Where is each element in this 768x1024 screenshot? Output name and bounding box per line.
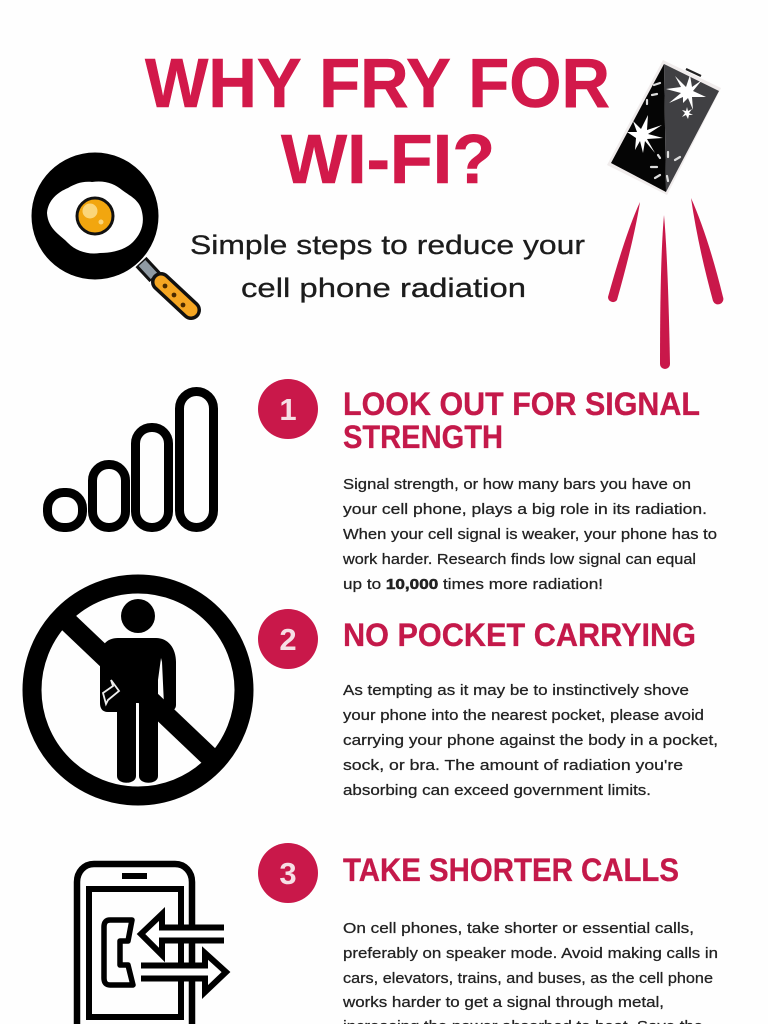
step 3 badge: 3	[279, 856, 297, 891]
step 2 badge: 2	[279, 622, 297, 657]
icon: signal strength bars	[48, 392, 214, 528]
step 1 heading: STRENGTH	[343, 419, 503, 455]
title: WI-FI?	[281, 120, 495, 198]
icon: cracked phone	[607, 60, 721, 195]
icon: frying pan with egg	[32, 152, 191, 310]
step 1 badge: 1	[279, 392, 297, 427]
step 1 text: work harder. Research finds low signal can equal	[342, 552, 696, 568]
step 2 heading: NO POCKET CARRYING	[343, 617, 696, 653]
subtitle: Simple steps to reduce your	[190, 230, 585, 260]
step 1 text: When your cell signal is weaker, your phone has to	[343, 527, 717, 543]
step 3 text: On cell phones, take shorter or essential calls,	[343, 921, 694, 937]
step 2 text: your phone into the nearest pocket, please avoid	[343, 708, 704, 724]
step 1 heading	[343, 386, 700, 455]
step 1 text	[342, 477, 717, 593]
step 2 text: absorbing can exceed government limits.	[343, 783, 651, 799]
step 3 text: works harder to get a signal through metal,	[342, 995, 664, 1011]
step 3 text: cars, elevators, trains, and buses, as the cell phone	[343, 971, 713, 987]
step 3 text: preferably on speaker mode. Avoid making calls in	[343, 946, 718, 962]
step 1 text: your cell phone, plays a big role in its radiation.	[343, 502, 707, 518]
step 2 text: sock, or bra. The amount of radiation you're	[343, 758, 683, 774]
step 2 badge	[258, 609, 318, 669]
step 2 text: carrying your phone against the body in a pocket,	[343, 733, 718, 749]
step 3 text	[342, 921, 718, 1024]
step 1 heading: LOOK OUT FOR SIGNAL	[343, 386, 700, 422]
step 2 text	[343, 683, 718, 799]
step 3 heading: TAKE SHORTER CALLS	[343, 852, 679, 888]
step 1 text: up to 10,000 times more radiation!	[343, 577, 603, 593]
icon: phone with call arrows	[77, 864, 226, 1024]
step 2 text: As tempting as it may be to instinctively shove	[343, 683, 689, 699]
step 1 badge	[258, 379, 318, 439]
subtitle: cell phone radiation	[241, 273, 526, 303]
icon: no pocket carrying person	[32, 584, 244, 796]
title	[145, 44, 610, 198]
step 1 text: Signal strength, or how many bars you have on	[343, 477, 691, 493]
icon: radiation rays	[608, 198, 723, 369]
subtitle	[190, 230, 585, 303]
title: WHY FRY FOR	[145, 44, 610, 122]
step 3 badge	[258, 843, 318, 903]
